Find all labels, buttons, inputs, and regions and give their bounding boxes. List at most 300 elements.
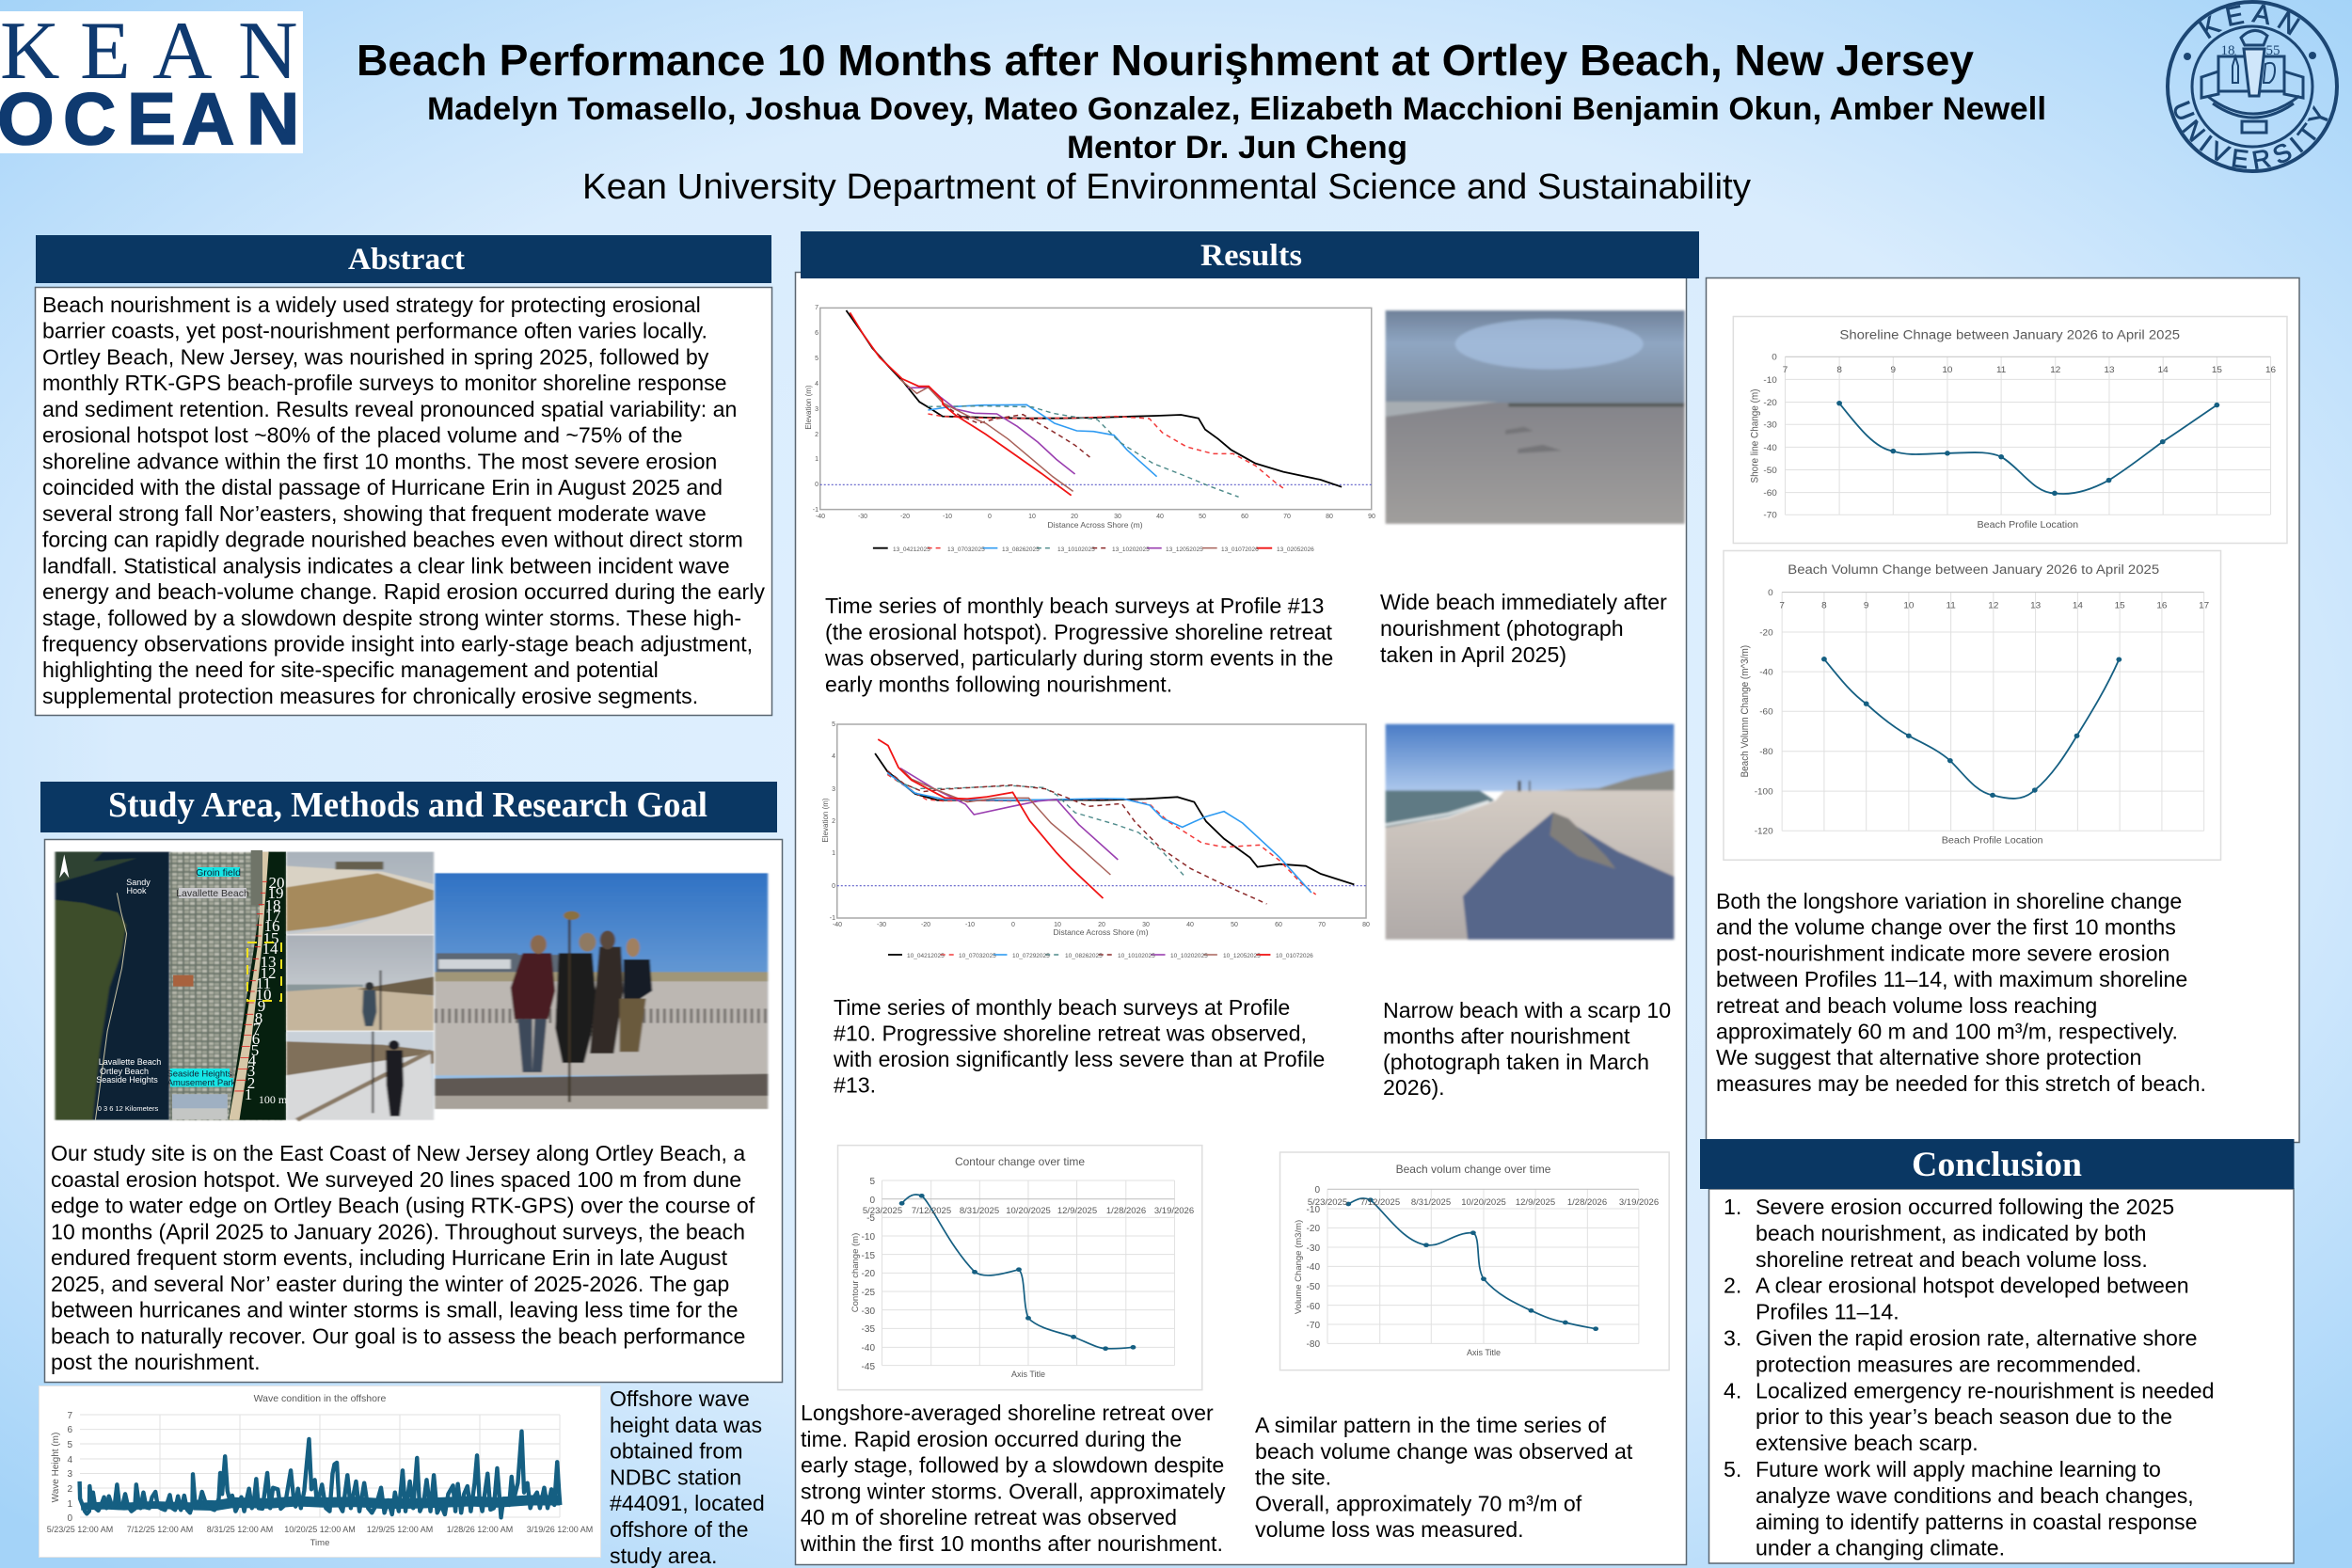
- profile numbers: 14: [262, 940, 278, 958]
- map: Ortley Beach profile lines: Lavallette Beach: [176, 888, 249, 899]
- text: volume change summary: the site.: [1255, 1465, 1331, 1490]
- text: wide beach caption: nourishment (photograph: [1380, 616, 1624, 641]
- chart: beach volume change by profile: 8: [1821, 601, 1827, 610]
- heading: abstract: [36, 235, 771, 283]
- chart: contour change over time: Contour change over time: [955, 1155, 1085, 1168]
- text: conclusion list: Future work will apply machine learning to: [1756, 1457, 2161, 1481]
- text: study site description: 2025, and several Nor’ easter during the winter of 2025-2026. The gap: [51, 1272, 729, 1296]
- chart: beach volume change by profile: 17: [2199, 601, 2209, 610]
- heading: conclusion: Conclusion: [1912, 1146, 2082, 1184]
- chart: beach volume change over time: 3/19/2026: [1619, 1197, 1659, 1208]
- chart: profile 13 time series: 5: [815, 356, 818, 362]
- chart: offshore wave condition: 5: [67, 1440, 72, 1450]
- text: longshore variation summary: approximately 60 m and 100 m³/m, respectively.: [1716, 1020, 2178, 1044]
- text: longshore variation summary: retreat and beach volume loss reaching: [1716, 993, 2097, 1018]
- text: wave data note: offshore of the: [610, 1517, 749, 1542]
- map: Ortley Beach profile lines: Seaside Heights: [167, 1069, 232, 1080]
- text: abstract body: stage, followed by a slowdown despite strong winter storms. These high-: [42, 606, 741, 630]
- profile numbers: 19: [267, 884, 284, 902]
- chart: shoreline change by profile: 15: [2212, 365, 2222, 375]
- text: profile 10 caption: with erosion significantly less severe than at Profile: [833, 1047, 1325, 1071]
- chart: profile 13 time series: 90: [1368, 514, 1375, 520]
- chart: shoreline change by profile: 9: [1891, 365, 1896, 375]
- text: longshore variation summary: between Profiles 11–14, with maximum shoreline: [1716, 967, 2187, 991]
- chart: profile 10 time series: 10: [1054, 922, 1061, 928]
- text: conclusion list: Localized emergency re-nourishment is needed: [1756, 1378, 2215, 1402]
- chart: shoreline change by profile: Shoreline Chnage between January 2026 to April 2025: [1839, 328, 2180, 342]
- chart: beach volume change over time: -60: [1307, 1302, 1320, 1312]
- icon: Kean University seal: 18: [2220, 43, 2235, 58]
- text: shoreline retreat summary: within the first 10 months after nourishment.: [800, 1531, 1223, 1556]
- chart: contour change over time: -30: [862, 1307, 875, 1317]
- chart: beach volume change over time: Volume Change (m3/m): [1294, 1220, 1304, 1314]
- chart: offshore wave condition: Time: [310, 1538, 329, 1548]
- chart: contour change over time: -35: [862, 1324, 875, 1335]
- text: shoreline retreat summary: 40 m of shoreline retreat was observed: [801, 1505, 1177, 1529]
- text: profile 10 caption: #10. Progressive shoreline retreat was observed,: [834, 1022, 1307, 1046]
- chart: beach volume change by profile: [1724, 551, 2221, 860]
- logo: Kean Ocean: KEAN: [0, 6, 298, 97]
- text: profile 10 caption: #13.: [834, 1072, 876, 1097]
- chart: profile 13 time series: 7: [815, 305, 818, 311]
- chart: profile 13 time series: -40: [816, 514, 825, 520]
- chart: profile 13 time series: 4: [815, 381, 818, 388]
- chart: profile 10 time series: -20: [921, 922, 930, 928]
- chart: beach volume change by profile: Beach Profile Location: [1942, 836, 2043, 847]
- chart: beach volume change over time: 8/31/2025: [1411, 1197, 1451, 1208]
- text: wide beach caption: taken in April 2025): [1380, 642, 1566, 667]
- chart: offshore wave condition: 6: [67, 1425, 72, 1435]
- text: study site description: Our study site is on the East Coast of New Jersey along Ortley Beach, a: [51, 1141, 745, 1165]
- text: conclusion list: 1.: [1724, 1195, 1741, 1219]
- chart: beach volume change by profile: 13: [2030, 601, 2041, 610]
- chart: contour change over time: -45: [862, 1362, 875, 1372]
- chart: profile 13 time series: 60: [1241, 514, 1248, 520]
- profile numbers: 7: [253, 1020, 262, 1037]
- chart: offshore wave condition: Wave Height (m): [51, 1433, 61, 1502]
- chart: profile 10 time series: -30: [877, 922, 886, 928]
- text: shoreline retreat summary: Longshore-averaged shoreline retreat over: [801, 1401, 1214, 1425]
- chart: contour change over time: 8/31/2025: [960, 1206, 999, 1216]
- icon: Kean University seal: [2166, 0, 2339, 173]
- text: study site description: 10 months (April 2025 to January 2026). Throughout surveys, the beach: [51, 1219, 745, 1243]
- photo: eroded dune scarp: [286, 852, 434, 934]
- text: longshore variation summary: post-nourishment indicate more severe erosion: [1716, 941, 2169, 965]
- profile numbers: 5: [251, 1041, 259, 1059]
- chart: contour change over time: -5: [866, 1213, 875, 1224]
- text: study site description: endured frequent storm events, including Hurricane Erin in late August: [51, 1245, 728, 1270]
- text: wave data note: Offshore wave: [610, 1386, 750, 1411]
- text: profile 13 caption: was observed, particularly during storm events in the: [824, 646, 1333, 671]
- text: conclusion list: aiming to identify patterns in coastal response: [1756, 1510, 2198, 1534]
- chart: beach volume change over time: 12/9/2025: [1516, 1197, 1555, 1208]
- chart: profile 13 time series: 70: [1283, 514, 1291, 520]
- text: volume change summary: beach volume change was observed at: [1255, 1439, 1633, 1464]
- chart: beach volume change by profile: -60: [1759, 707, 1773, 718]
- text: longshore variation summary: measures may be needed for this stretch of beach.: [1716, 1071, 2206, 1096]
- chart: profile 10 time series: 10_07032025: [959, 953, 996, 959]
- chart: contour change over time: -15: [862, 1251, 875, 1261]
- chart: beach volume change by profile: Beach Volumn Change (m^3/m): [1740, 645, 1751, 777]
- text: conclusion list: 3.: [1724, 1326, 1741, 1351]
- panel: longshore change: [1707, 278, 2299, 1142]
- map: regional satellite: Ortley Beach: [100, 1067, 149, 1076]
- chart: profile 13 time series: 30: [1114, 514, 1121, 520]
- chart: contour change over time: Axis Title: [1011, 1370, 1045, 1379]
- photo: research team: [435, 873, 768, 1109]
- text: profile 13 caption: early months following nourishment.: [825, 672, 1172, 696]
- chart: beach volume change over time: -40: [1307, 1262, 1320, 1273]
- chart: offshore wave condition: 5/23/25 12:00 AM: [47, 1525, 113, 1534]
- chart: shoreline change by profile: -60: [1763, 488, 1777, 499]
- profile numbers: 2: [247, 1074, 255, 1092]
- chart: shoreline change by profile: 11: [1996, 365, 2006, 375]
- chart: beach volume change by profile: 14: [2073, 601, 2084, 610]
- text: conclusion list: 5.: [1724, 1457, 1741, 1481]
- text: conclusion list: Severe erosion occurred following the 2025: [1756, 1195, 2174, 1219]
- chart: beach volume change by profile: 9: [1864, 601, 1868, 610]
- chart: offshore wave condition: 1: [67, 1499, 72, 1510]
- chart: beach volume change by profile: 11: [1946, 601, 1956, 610]
- chart: beach volume change by profile: 12: [1988, 601, 1998, 610]
- chart: profile 13 time series: 13_01072026: [1221, 546, 1259, 553]
- profile numbers: 15: [263, 929, 278, 947]
- chart: profile 13 time series: 6: [815, 330, 818, 337]
- text: conclusion list: prior to this year’s beach season due to the: [1756, 1404, 2172, 1429]
- chart: shoreline change by profile: -30: [1763, 420, 1777, 431]
- chart: profile 13 time series: 13_10102025: [1057, 546, 1095, 553]
- text: wave data note: #44091, located: [610, 1491, 765, 1515]
- chart: offshore wave condition: 2: [67, 1484, 72, 1495]
- heading: abstract: Abstract: [348, 243, 465, 277]
- chart: offshore wave condition: 12/9/25 12:00 AM: [367, 1525, 433, 1534]
- chart: profile 13 time series: 40: [1156, 514, 1164, 520]
- chart: profile 10 time series: Elevation (m): [821, 798, 830, 843]
- map: regional satellite: 0 3 6 12 Kilometers: [98, 1104, 159, 1113]
- text: longshore variation summary: We suggest that alternative shore protection: [1716, 1045, 2141, 1069]
- map: regional satellite: Sandy: [126, 878, 151, 887]
- chart: beach volume change by profile: 0: [1768, 588, 1773, 598]
- chart: offshore wave condition: 10/20/25 12:00 AM: [284, 1525, 356, 1534]
- icon: Kean University seal: 55: [2265, 43, 2280, 58]
- panel: results: [796, 231, 1699, 1565]
- text: abstract body: coincided with the distal passage of Hurricane Erin in August 2025 and: [42, 475, 723, 499]
- chart: beach volume change by profile: 10: [1903, 601, 1914, 610]
- text: study site description: between hurricanes and winter storms is small, leaving less time for the: [51, 1298, 739, 1323]
- text: longshore variation summary: Both the longshore variation in shoreline change: [1716, 889, 2182, 913]
- text: conclusion list: 4.: [1724, 1378, 1741, 1402]
- chart: profile 13 time series: 1: [815, 456, 818, 463]
- text: conclusion list: A clear erosional hotspot developed between: [1756, 1274, 2189, 1298]
- chart: beach volume change over time: [1280, 1152, 1669, 1370]
- text: abstract body: shoreline advance within the first 10 months. The most severe erosion: [42, 449, 717, 473]
- chart: beach volume change by profile: 7: [1779, 601, 1785, 610]
- chart: offshore wave condition: 3: [67, 1469, 72, 1480]
- text: conclusion list: under a changing climate.: [1756, 1536, 2005, 1560]
- chart: profile 10 time series: 60: [1275, 922, 1282, 928]
- text: abstract body: energy and beach-volume change. Rapid erosion occurred during the early: [42, 579, 765, 604]
- chart: profile 10 time series: 2: [832, 818, 835, 825]
- chart: profile 13 time series: 13_10202025: [1112, 546, 1150, 553]
- chart: contour change over time: [838, 1146, 1202, 1390]
- chart: profile 10 time series: 30: [1142, 922, 1150, 928]
- text: conclusion list: shoreline retreat and beach volume loss.: [1756, 1247, 2148, 1272]
- panel: study area, methods and research goal: [40, 782, 783, 1383]
- title: Beach Performance 10 Months after Nourişhment at Ortley Beach, New Jersey: [357, 36, 1974, 85]
- profile numbers: 18: [265, 896, 280, 914]
- text: conclusion list: Profiles 11–14.: [1756, 1300, 1899, 1324]
- profile numbers: 13: [260, 953, 277, 971]
- chart: profile 13 time series: Distance Across Shore (m): [1047, 520, 1143, 530]
- chart: profile 10 time series: 0: [1011, 922, 1015, 928]
- text: volume change summary: Overall, approximately 70 m³/m of: [1255, 1491, 1582, 1515]
- chart: profile 13 time series: 13_04212025: [893, 546, 930, 553]
- chart: offshore wave condition: 1/28/26 12:00 AM: [447, 1525, 513, 1534]
- chart: contour change over time: 0: [869, 1196, 875, 1206]
- text: narrow beach caption: Narrow beach with a scarp 10: [1383, 998, 1671, 1022]
- chart: shoreline change by profile: 12: [2050, 365, 2060, 375]
- text: narrow beach caption: (photograph taken in March: [1383, 1050, 1649, 1074]
- chart: profile 13 time series: 13_08262025: [1002, 546, 1040, 553]
- photo: wide beach after nourishment: [1386, 310, 1685, 524]
- text: conclusion list: protection measures are recommended.: [1756, 1352, 2141, 1376]
- text: conclusion list: Given the rapid erosion rate, alternative shore: [1756, 1326, 2198, 1351]
- chart: profile 13 time series: 13_07032025: [947, 546, 985, 553]
- chart: profile 10 time series: 10_07292025: [1012, 953, 1050, 959]
- chart: profile 10 time series: 10_10202025: [1170, 953, 1208, 959]
- photo: narrow beach with scarp: [1386, 724, 1674, 940]
- chart: profile 10 time series: 10_10102025: [1118, 953, 1155, 959]
- chart: profile 10 time series: 4: [832, 753, 835, 760]
- chart: profile 10 time series: 10_04212025: [907, 953, 945, 959]
- heading: results: Results: [1200, 239, 1302, 273]
- chart: shoreline change by profile: -50: [1763, 466, 1777, 476]
- chart: shoreline change by profile: 16: [2265, 365, 2276, 375]
- chart: contour change over time: -10: [862, 1232, 875, 1243]
- chart: profile 10 time series: 1: [832, 850, 835, 857]
- chart: beach volume change over time: 7/12/2025: [1360, 1197, 1400, 1208]
- profile numbers: 20: [269, 874, 284, 892]
- chart: shoreline change by profile: 14: [2158, 365, 2169, 375]
- chart: profile 10 time series: 0: [832, 883, 835, 890]
- map: regional satellite: Hook: [126, 886, 147, 895]
- text: abstract body: supplemental protection measures for chronically erosive segments.: [42, 684, 698, 708]
- chart: profile 10 time series: -10: [965, 922, 975, 928]
- heading: study area: Study Area, Methods and Research Goal: [108, 785, 707, 825]
- chart: profile 13 time series: 13_12052025: [1166, 546, 1203, 553]
- chart: shoreline change by profile: 7: [1783, 365, 1788, 375]
- chart: shoreline change by profile: Beach Profile Location: [1977, 520, 2078, 531]
- text: conclusion list: beach nourishment, as indicated by both: [1756, 1221, 2147, 1245]
- chart: profile 13 time series: 80: [1326, 514, 1333, 520]
- chart: shoreline change by profile: -40: [1763, 443, 1777, 453]
- chart: shoreline change by profile: 10: [1942, 365, 1952, 375]
- chart: offshore wave condition: Wave condition in the offshore: [254, 1393, 386, 1404]
- profile numbers: 3: [247, 1062, 255, 1080]
- chart: contour change over time: 7/12/2025: [912, 1206, 951, 1216]
- chart: profile 13 time series: [804, 305, 1375, 553]
- chart: profile 10 time series: 5: [832, 721, 835, 728]
- chart: shoreline change by profile: 8: [1836, 365, 1842, 375]
- text: abstract body: highlighting the need for site-specific management and potential: [42, 657, 659, 682]
- profile numbers: 10: [256, 986, 271, 1004]
- chart: profile 13 time series: -20: [900, 514, 910, 520]
- text: narrow beach caption: 2026).: [1383, 1075, 1445, 1100]
- mentor: Mentor Dr. Jun Cheng: [1067, 130, 1407, 166]
- profile numbers: 8: [255, 1009, 262, 1027]
- chart: offshore wave condition: 7/12/25 12:00 AM: [127, 1525, 193, 1534]
- map: regional satellite: Lavallette Beach: [99, 1057, 161, 1067]
- text: volume change summary: A similar pattern in the time series of: [1255, 1413, 1607, 1437]
- chart: profile 10 time series: 20: [1098, 922, 1105, 928]
- chart: contour change over time: 10/20/2025: [1006, 1206, 1051, 1216]
- text: abstract body: Ortley Beach, New Jersey, was nourished in spring 2025, followed by: [42, 344, 709, 369]
- chart: contour change over time: 5: [869, 1177, 875, 1187]
- heading: conclusion: [1700, 1139, 2294, 1189]
- profile numbers: 12: [260, 964, 277, 982]
- text: wave data note: height data was: [610, 1413, 762, 1437]
- chart: profile 10 time series: 10_01072026: [1276, 953, 1313, 959]
- text: profile 13 caption: Time series of monthly beach surveys at Profile #13: [825, 594, 1324, 618]
- chart: beach volume change over time: -20: [1307, 1224, 1320, 1234]
- chart: profile 13 time series: -30: [858, 514, 867, 520]
- map: regional satellite: [56, 852, 170, 1120]
- text: conclusion list: analyze wave conditions and beach changes,: [1756, 1483, 2194, 1508]
- text: wave data note: obtained from: [610, 1439, 743, 1464]
- chart: beach volume change by profile: -80: [1759, 747, 1773, 757]
- photo: surveyor by fence: [286, 1032, 434, 1120]
- chart: profile 13 time series: -10: [943, 514, 952, 520]
- chart: profile 13 time series: 0: [815, 482, 818, 488]
- text: conclusion list: 2.: [1724, 1274, 1741, 1298]
- text: abstract body: frequency observations provide insight into early-stage beach adjustment,: [42, 631, 753, 656]
- chart: beach volume change over time: Beach volum change over time: [1396, 1163, 1551, 1176]
- map: Ortley Beach profile lines: 100 m: [259, 1093, 288, 1106]
- chart: offshore wave condition: 4: [67, 1455, 72, 1465]
- chart: profile 10 time series: [821, 721, 1370, 959]
- map: Ortley Beach profile lines: [167, 850, 288, 1120]
- chart: profile 10 time series: 10_12052025: [1223, 953, 1261, 959]
- chart: contour change over time: -25: [862, 1288, 875, 1298]
- icon: Kean University seal: UNIVERSITY: [2173, 100, 2328, 169]
- logo: Kean Ocean: [0, 6, 303, 160]
- chart: profile 10 time series: -40: [833, 922, 842, 928]
- text: abstract body: monthly RTK-GPS beach-profile surveys to monitor shoreline response: [42, 371, 727, 395]
- chart: beach volume change by profile: 15: [2115, 601, 2125, 610]
- profile numbers: 1: [245, 1085, 252, 1103]
- chart: profile 13 time series: 2: [815, 432, 818, 438]
- chart: shoreline change by profile: [1733, 316, 2287, 544]
- chart: beach volume change by profile: 16: [2156, 601, 2167, 610]
- chart: profile 13 time series: 3: [815, 406, 818, 413]
- chart: beach volume change over time: -50: [1307, 1282, 1320, 1292]
- chart: beach volume change over time: -70: [1307, 1321, 1320, 1331]
- chart: shoreline change by profile: -10: [1763, 375, 1777, 386]
- text: abstract body: several strong fall Nor’easters, showing that frequent moderate wave: [42, 501, 707, 526]
- chart: beach volume change over time: 10/20/2025: [1461, 1197, 1506, 1208]
- chart: contour change over time: -40: [862, 1343, 875, 1354]
- chart: profile 13 time series: 20: [1071, 514, 1078, 520]
- chart: offshore wave condition: 3/19/26 12:00 AM: [527, 1525, 593, 1534]
- text: abstract body: erosional hotspot lost ~80% of the placed volume and ~75% of the: [42, 423, 683, 448]
- text: volume change summary: volume loss was measured.: [1255, 1517, 1524, 1542]
- heading: results: [801, 231, 1699, 278]
- chart: shoreline change by profile: -70: [1763, 511, 1777, 521]
- chart: profile 10 time series: 40: [1186, 922, 1194, 928]
- chart: profile 13 time series: 50: [1199, 514, 1206, 520]
- text: abstract body: barrier coasts, yet post-nourishment performance often varies locally.: [42, 319, 707, 343]
- map: regional satellite: Seaside Heights: [96, 1075, 158, 1085]
- profile numbers: 4: [248, 1052, 257, 1069]
- chart: beach volume change by profile: -20: [1759, 628, 1773, 638]
- text: narrow beach caption: months after nourishment: [1383, 1023, 1630, 1048]
- text: study site description: beach to naturally recover. Our goal is to assess the beach performance: [51, 1323, 745, 1348]
- chart: offshore wave condition: 8/31/25 12:00 AM: [207, 1525, 273, 1534]
- profile numbers: 17: [265, 907, 281, 925]
- chart: beach volume change by profile: Beach Volumn Change between January 2026 to April 2025: [1788, 563, 2159, 578]
- chart: profile 13 time series: Elevation (m): [804, 385, 813, 430]
- chart: shoreline change by profile: Shore line Change (m): [1750, 389, 1761, 483]
- text: abstract body: Beach nourishment is a widely used strategy for protecting erosional: [42, 293, 701, 317]
- chart: profile 10 time series: 3: [832, 786, 835, 793]
- chart: profile 10 time series: 10_08262025: [1065, 953, 1103, 959]
- profile numbers: 16: [263, 917, 280, 935]
- text: conclusion list: extensive beach scarp.: [1756, 1431, 1979, 1455]
- chart: profile 10 time series: 50: [1231, 922, 1238, 928]
- chart: contour change over time: 5/23/2025: [863, 1206, 902, 1216]
- text: profile 10 caption: Time series of monthly beach surveys at Profile: [834, 995, 1290, 1020]
- text: longshore variation summary: and the volume change over the first 10 months: [1716, 915, 2176, 940]
- profile numbers: [245, 874, 284, 1103]
- text: study site description: coastal erosion hotspot. We surveyed 20 lines spaced 100 m from dune: [51, 1167, 741, 1192]
- text: abstract body: and sediment retention. Results reveal pronounced spatial variability: an: [42, 397, 737, 421]
- chart: profile 10 time series: 70: [1318, 922, 1326, 928]
- chart: offshore wave condition: 7: [67, 1411, 72, 1421]
- chart: profile 13 time series: 0: [988, 514, 992, 520]
- text: profile 13 caption: (the erosional hotspot). Progressive shoreline retreat: [825, 620, 1333, 644]
- chart: offshore wave condition: [40, 1386, 600, 1558]
- panel: abstract: [36, 235, 771, 715]
- chart: profile 10 time series: Distance Across Shore (m): [1053, 927, 1149, 937]
- chart: beach volume change by profile: -120: [1755, 827, 1773, 837]
- chart: beach volume change by profile: -100: [1755, 787, 1773, 797]
- chart: profile 13 time series: 13_02052026: [1277, 546, 1314, 553]
- chart: shoreline change by profile: -20: [1763, 398, 1777, 408]
- chart: profile 13 time series: -1: [813, 507, 818, 514]
- chart: contour change over time: 12/9/2025: [1057, 1206, 1097, 1216]
- text: wide beach caption: Wide beach immediately after: [1380, 590, 1667, 614]
- profile numbers: 11: [256, 974, 271, 992]
- heading: study area: [40, 782, 777, 832]
- affiliation: Kean University Department of Environmental Science and Sustainability: [582, 167, 1751, 207]
- chart: contour change over time: -20: [862, 1269, 875, 1279]
- chart: beach volume change over time: -10: [1307, 1205, 1320, 1215]
- text: shoreline retreat summary: time. Rapid erosion occurred during the: [801, 1427, 1182, 1451]
- logo: Kean Ocean: OCEAN: [0, 77, 299, 160]
- chart: profile 13 time series: 10: [1028, 514, 1036, 520]
- chart: beach volume change over time: -30: [1307, 1243, 1320, 1254]
- chart: beach volume change over time: 5/23/2025: [1308, 1197, 1347, 1208]
- text: study site description: post the nourishment.: [51, 1350, 261, 1374]
- chart: profile 10 time series: 80: [1362, 922, 1370, 928]
- chart: beach volume change over time: 0: [1314, 1185, 1320, 1196]
- chart: beach volume change over time: 1/28/2026: [1567, 1197, 1607, 1208]
- chart: profile 10 time series: -1: [830, 915, 835, 922]
- chart: beach volume change over time: Axis Title: [1467, 1348, 1501, 1357]
- text: shoreline retreat summary: strong winter storms. Overall, approximately: [801, 1479, 1226, 1503]
- text: abstract body: landfall. Statistical analysis indicates a clear link between incident wave: [42, 553, 730, 578]
- authors: Madelyn Tomasello, Joshua Dovey, Mateo Gonzalez, Elizabeth Macchioni Benjamin Okun, Amber Newell: [427, 91, 2046, 127]
